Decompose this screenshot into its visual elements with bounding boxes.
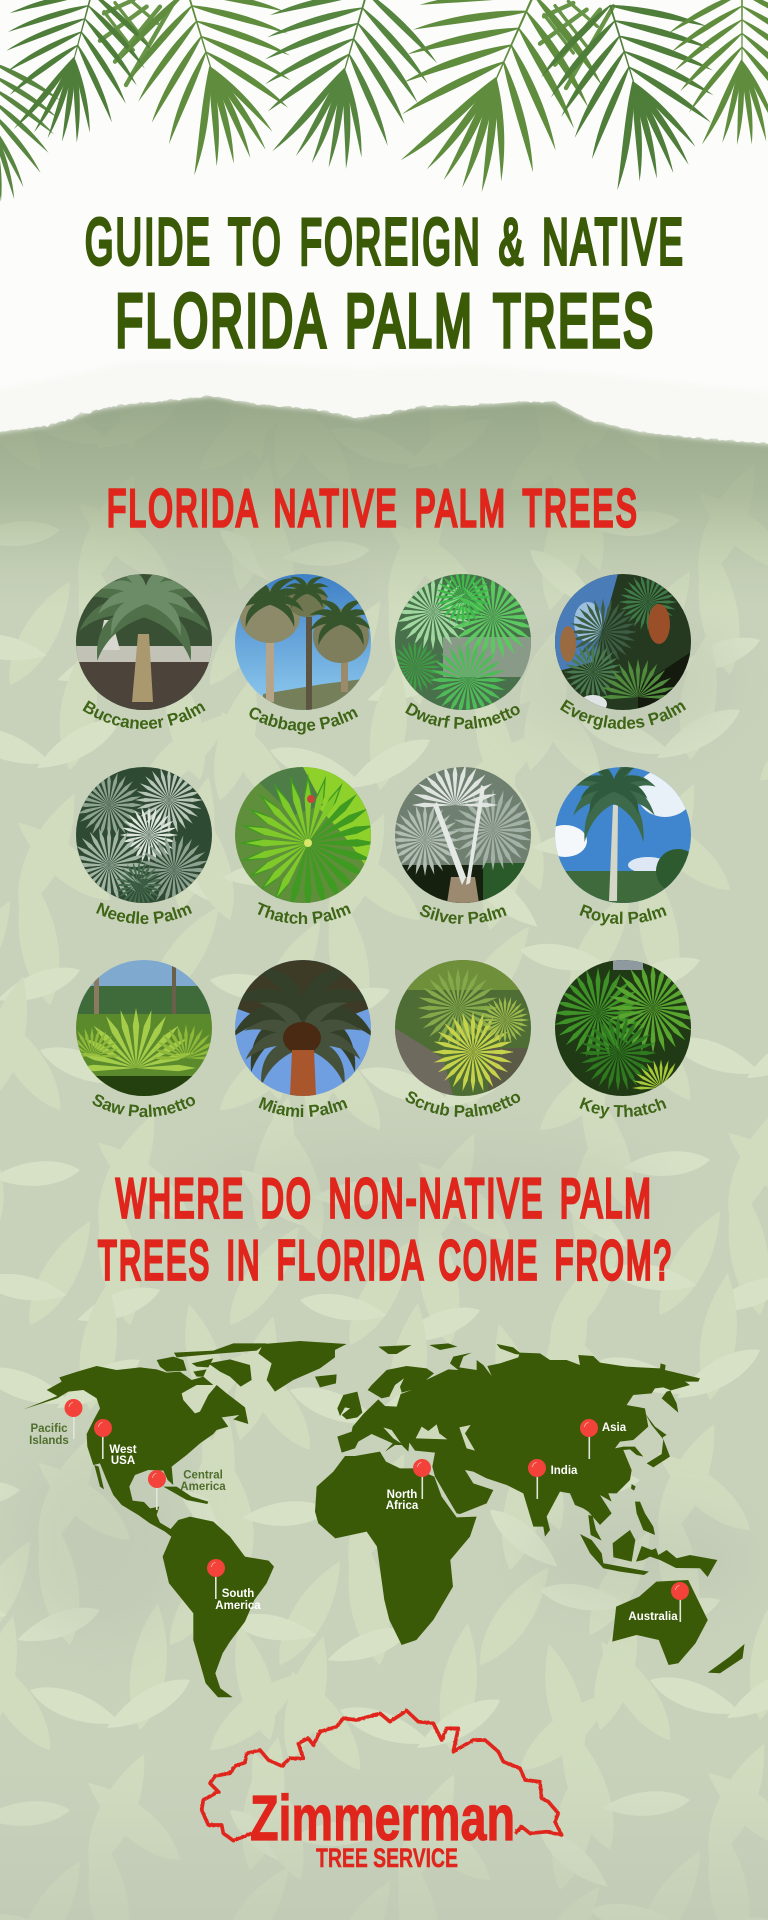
title (85, 205, 685, 362)
label: West USA: USA (111, 1455, 135, 1467)
photo: Everglades Palm (555, 573, 691, 713)
label: Cabbage Palm: Cabbage Palm (249, 708, 358, 734)
map: the Americas (23, 1341, 347, 1697)
label: Pacific Islands: Islands (29, 1435, 69, 1447)
card: Royal Palm (555, 767, 691, 926)
map: inland seas (383, 1424, 475, 1451)
label: Saw Palmetto: Saw Palmetto (92, 1094, 196, 1118)
label: Silver Palm: Silver Palm (420, 905, 507, 924)
label: North Africa: Africa (386, 1500, 419, 1512)
photo: Silver Palm (389, 762, 534, 903)
label: Pacific Islands: Pacific (30, 1423, 68, 1435)
card: Key Thatch (555, 960, 691, 1118)
heading: origin of non-native palms (98, 1167, 673, 1291)
pin: India (528, 1459, 546, 1499)
logo: tree outline (202, 1711, 562, 1841)
logo: Zimmerman Tree Service (202, 1711, 562, 1873)
label: Dwarf Palmetto: Dwarf Palmetto (405, 702, 520, 730)
label: North Africa: North (387, 1489, 417, 1501)
label: South America: America (215, 1600, 261, 1612)
pin: South America (207, 1559, 225, 1599)
card: Thatch Palm (235, 767, 371, 924)
map: Europe, Africa and Asia (315, 1343, 700, 1645)
label: Needle Palm: Needle Palm (96, 902, 192, 924)
label: Royal Palm: Royal Palm (580, 904, 667, 926)
pin: Central America (148, 1470, 166, 1510)
label: Australia: Australia (628, 1611, 678, 1623)
label: Key Thatch: Key Thatch (580, 1097, 666, 1118)
label: Scrub Palmetto: Scrub Palmetto (406, 1091, 520, 1118)
photo: Royal Palm (555, 767, 691, 903)
label: Everglades Palm: Everglades Palm (560, 699, 686, 730)
card: Needle Palm (76, 767, 212, 924)
photo: Miami Palm (235, 960, 371, 1096)
label: South America: South (222, 1588, 254, 1600)
pin: North Africa (413, 1459, 431, 1499)
panel: grid of twelve native palms (76, 574, 691, 1118)
photo: Thatch Palm (235, 767, 371, 903)
card: Saw Palmetto (76, 960, 212, 1118)
pin: West USA (94, 1419, 112, 1459)
pin: Pacific Islands (64, 1399, 82, 1439)
photo: Scrub Palmetto (395, 960, 531, 1096)
torn white paper header (0, 0, 768, 446)
label: India: India (551, 1465, 578, 1477)
pin: Asia (580, 1419, 598, 1459)
card: Cabbage Palm (235, 574, 371, 734)
label: Asia: Asia (602, 1422, 627, 1434)
photo: Saw Palmetto (76, 960, 212, 1096)
card: Miami Palm (235, 960, 371, 1118)
label: Central America: America (180, 1481, 226, 1493)
card: Dwarf Palmetto (395, 574, 531, 730)
card: Buccaneer Palm (76, 574, 212, 729)
card: Everglades Palm (555, 574, 691, 730)
label: Buccaneer Palm: Buccaneer Palm (82, 700, 206, 729)
logo: tagline: TREE SERVICE (316, 1843, 458, 1873)
photo: Dwarf Palmetto (395, 574, 531, 710)
map: Asian islands (580, 1413, 717, 1577)
logo: wordmark: Zimmerman (250, 1782, 515, 1854)
map: Australia and New Zealand (612, 1580, 744, 1673)
card: Scrub Palmetto (395, 960, 531, 1118)
label: Thatch Palm: Thatch Palm (258, 902, 351, 924)
palm fronds along the top (0, 0, 768, 226)
photo: Key Thatch (552, 960, 699, 1096)
label: Miami Palm: Miami Palm (258, 1096, 348, 1118)
photo: Cabbage Palm (235, 570, 373, 712)
photo: Needle Palm (71, 766, 212, 909)
card: Silver Palm (395, 767, 531, 924)
world map (23, 1341, 744, 1697)
pin: Australia (671, 1582, 689, 1622)
label: Central America: Central (183, 1470, 223, 1482)
label: West USA: West (109, 1444, 137, 1456)
photo: Buccaneer Palm (76, 574, 212, 710)
